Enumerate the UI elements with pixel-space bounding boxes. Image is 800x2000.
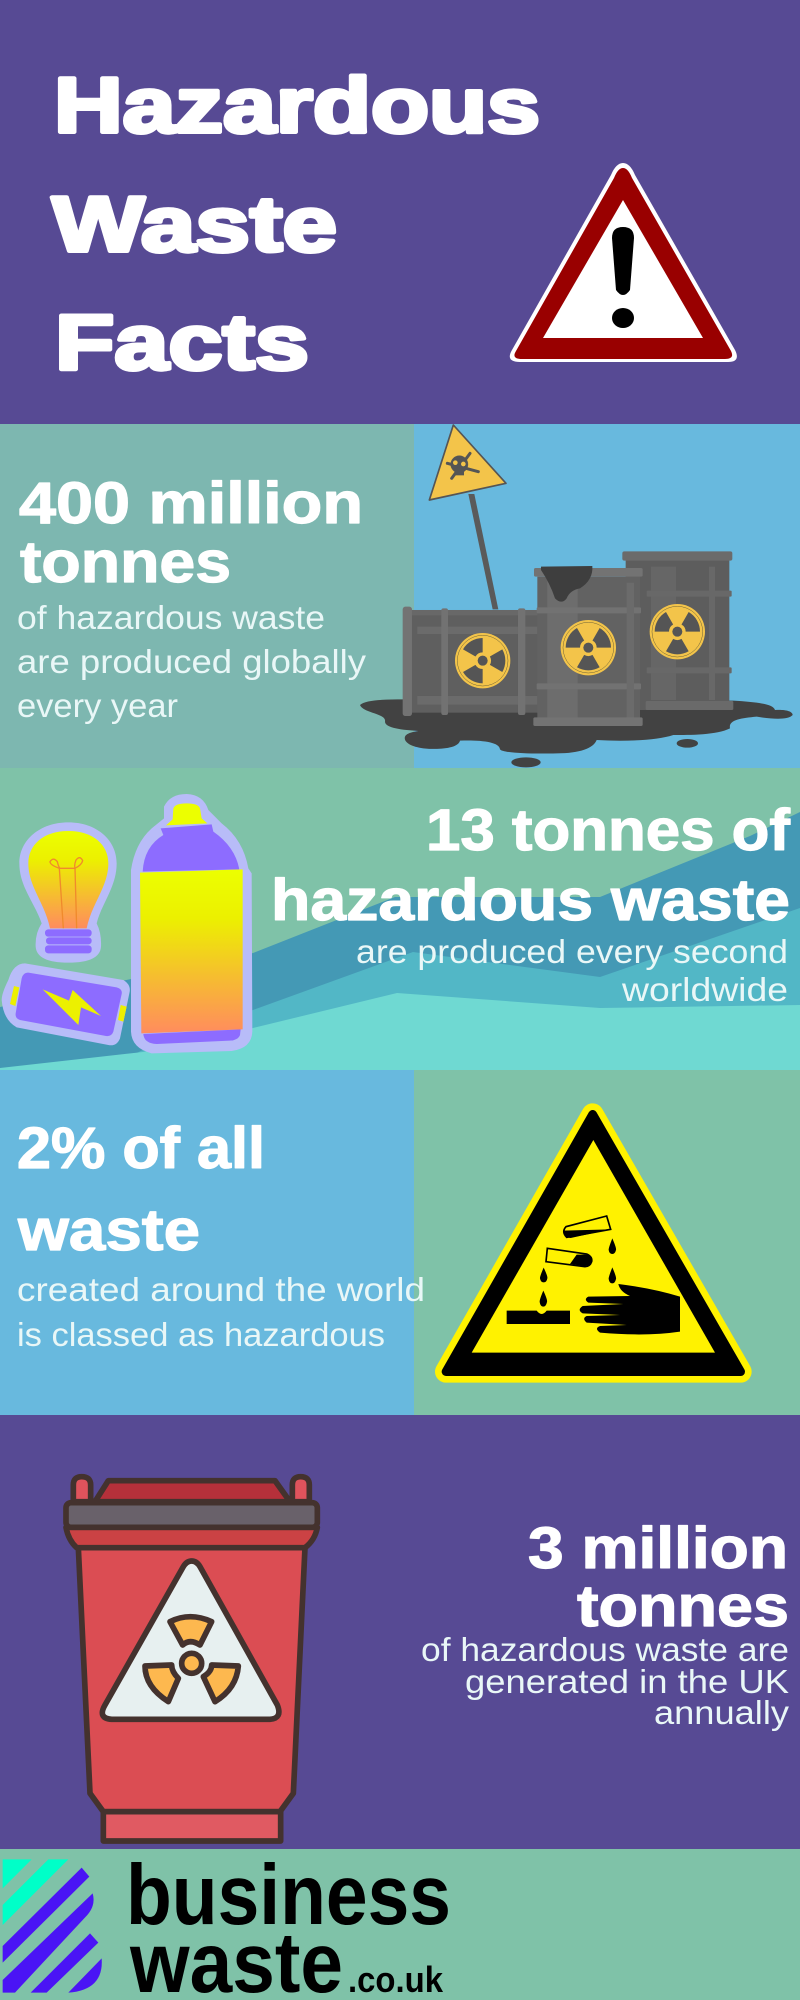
heading: 13 tonnes of hazardous waste bbox=[271, 798, 791, 933]
heading: 2% of all waste: 2% of all bbox=[17, 1116, 265, 1181]
icon: warning triangle bbox=[510, 163, 737, 362]
text: of hazardous waste are produced globally every year bbox=[17, 599, 367, 724]
heading: 400 million tonnes bbox=[19, 471, 363, 595]
text: are produced every second worldwide: are produced every second bbox=[356, 933, 788, 970]
heading: 3 million tonnes: tonnes bbox=[577, 1574, 789, 1639]
heading: 400 million tonnes: 400 million bbox=[19, 471, 363, 536]
heading: 2% of all waste: waste bbox=[17, 1198, 200, 1263]
text: are produced every second worldwide bbox=[356, 933, 788, 1008]
heading: 3 million tonnes: 3 million bbox=[528, 1516, 788, 1581]
title: Hazardous bbox=[54, 61, 540, 149]
icon: radiation symbol on back barrel bbox=[650, 604, 705, 659]
icon: red hazardous waste bin bbox=[66, 1477, 317, 1841]
panel: 400 million tonnes bbox=[0, 424, 800, 768]
text: are produced every second worldwide: worldwide bbox=[621, 971, 788, 1008]
text: of hazardous waste are produced globally every year: of hazardous waste bbox=[17, 599, 325, 636]
title bbox=[52, 61, 540, 386]
text: created around the world is classed as hazardous bbox=[17, 1271, 425, 1353]
icon: radiation symbol on lying barrel bbox=[455, 633, 510, 688]
text: of hazardous waste are produced globally every year: are produced globally bbox=[17, 643, 367, 680]
icon: corrosive warning sign bbox=[446, 1114, 741, 1372]
icon: light bulb bbox=[19, 822, 117, 963]
icon: radiation symbol on middle barrel bbox=[561, 620, 616, 675]
panel: footer logo bbox=[0, 1848, 800, 2000]
logo wordmark: businesswaste.co.uk bbox=[126, 1848, 451, 2000]
text: of hazardous waste are generated in the UK annually bbox=[421, 1631, 790, 1731]
illustration: leaking barrels and skull sign bbox=[360, 425, 793, 767]
text: of hazardous waste are generated in the UK annually: of hazardous waste are bbox=[421, 1631, 789, 1668]
text: created around the world is classed as hazardous: created around the world bbox=[17, 1271, 425, 1308]
logo wordmark: businesswaste.co.uk: .co.uk bbox=[348, 1959, 444, 2000]
text: of hazardous waste are generated in the UK annually: annually bbox=[654, 1694, 790, 1731]
title: Waste bbox=[52, 180, 337, 268]
panel: header bbox=[0, 0, 800, 424]
icon: battery bbox=[2, 963, 130, 1045]
heading: 3 million tonnes bbox=[528, 1516, 789, 1639]
logo wordmark: businesswaste.co.uk: business bbox=[126, 1848, 451, 1943]
panel: 3 million tonnes bbox=[0, 1415, 800, 1849]
text: of hazardous waste are produced globally every year: every year bbox=[17, 687, 178, 724]
heading: 2% of all waste bbox=[17, 1116, 265, 1263]
heading: 400 million tonnes: tonnes bbox=[20, 530, 231, 595]
illustration: bulb, battery and aerosol can bbox=[2, 794, 252, 1053]
panel: 2% of all waste bbox=[0, 1070, 800, 1415]
title: Facts bbox=[55, 298, 309, 386]
icon: aerosol can bbox=[131, 794, 252, 1053]
panel: 13 tonnes of hazardous waste bbox=[0, 768, 800, 1070]
text: of hazardous waste are generated in the UK annually: generated in the UK bbox=[465, 1663, 789, 1700]
heading: 13 tonnes of hazardous waste: hazardous waste bbox=[271, 868, 790, 933]
heading: 13 tonnes of hazardous waste: 13 tonnes of bbox=[426, 798, 791, 863]
text: created around the world is classed as hazardous: is classed as hazardous bbox=[17, 1316, 385, 1353]
icon: striped logo mark bbox=[3, 1859, 102, 1993]
